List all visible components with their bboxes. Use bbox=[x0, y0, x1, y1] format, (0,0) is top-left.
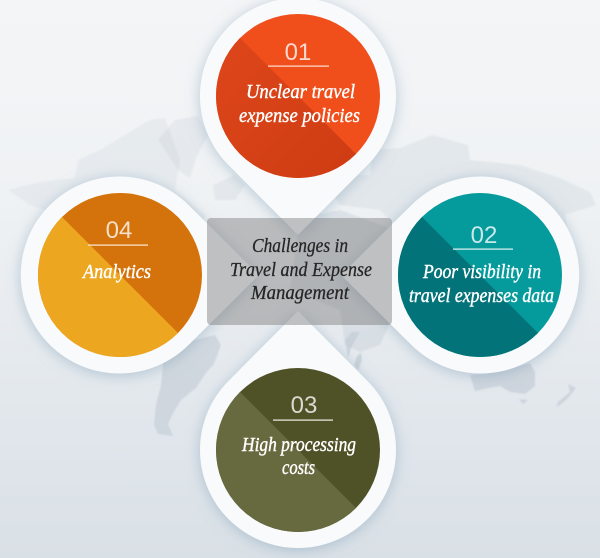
number 02: 02 bbox=[471, 222, 497, 249]
center box bbox=[207, 218, 392, 325]
circle: 01 bbox=[216, 14, 380, 178]
label 03: costs bbox=[282, 458, 315, 479]
number 03: 03 bbox=[291, 392, 317, 419]
label 04: Analytics bbox=[81, 262, 151, 283]
marker: top bbox=[200, 0, 396, 235]
label 02: travel expenses data bbox=[409, 286, 554, 307]
teardrop: right bbox=[341, 176, 579, 374]
label 01: expense policies bbox=[239, 106, 360, 127]
divider 04 bbox=[88, 244, 148, 246]
center title: Challenges in bbox=[252, 235, 348, 257]
marker: left bbox=[21, 176, 259, 374]
circle: 04 bbox=[38, 193, 202, 357]
circle: 02 bbox=[398, 193, 562, 357]
number 04: 04 bbox=[106, 217, 132, 244]
teardrop: bottom bbox=[200, 311, 396, 548]
circle: 03 bbox=[216, 368, 380, 532]
number 01: 01 bbox=[285, 39, 311, 66]
center title: Travel and Expense bbox=[230, 259, 372, 281]
label 03: High processing bbox=[241, 435, 356, 456]
world map bbox=[8, 116, 596, 436]
divider 02 bbox=[453, 248, 513, 250]
center panel bbox=[207, 218, 392, 325]
marker: bottom bbox=[200, 311, 396, 548]
label 02: Poor visibility in bbox=[422, 262, 541, 283]
center title: Management bbox=[250, 282, 350, 304]
teardrop: top bbox=[200, 0, 396, 235]
divider 03 bbox=[273, 420, 333, 421]
divider 01 bbox=[268, 66, 329, 67]
label 01: Unclear travel bbox=[246, 82, 355, 103]
teardrop: left bbox=[21, 176, 259, 374]
marker: right bbox=[341, 176, 579, 374]
